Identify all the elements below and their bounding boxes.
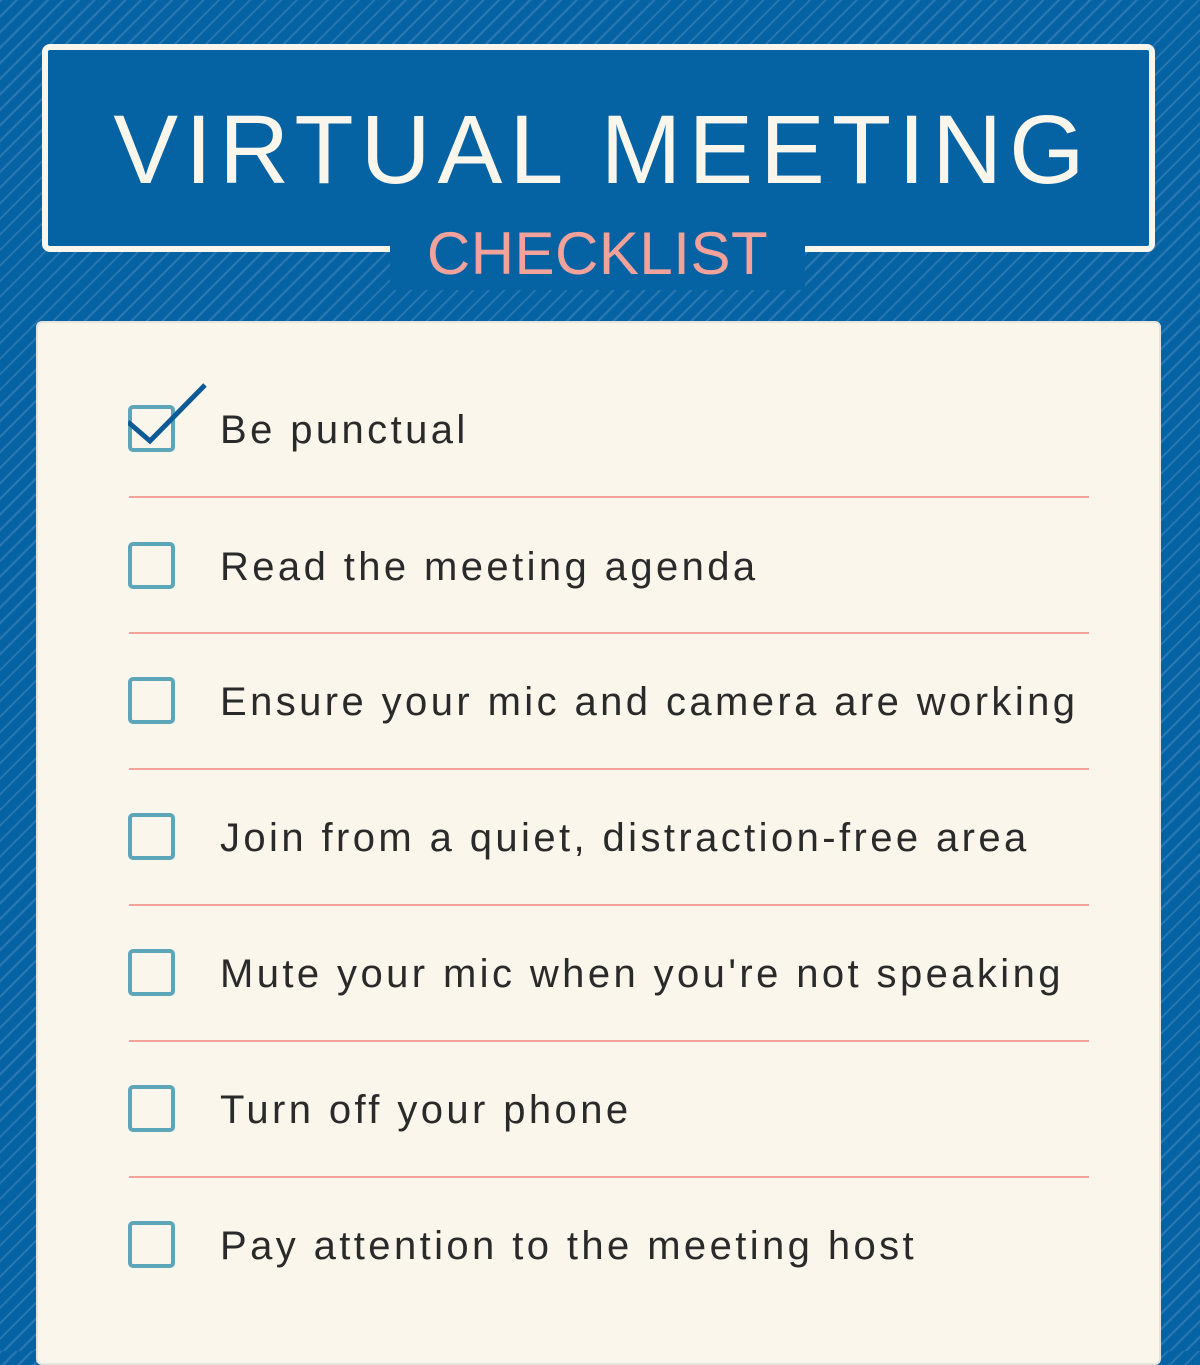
panel: checklist [36, 321, 1161, 1365]
item 1: Be punctual [220, 408, 469, 452]
subtitle [390, 210, 805, 290]
item 3: Ensure your mic and camera are working [220, 680, 1078, 724]
item 2: Read the meeting agenda [220, 545, 759, 589]
title box [42, 44, 1155, 252]
item 6: Turn off your phone [220, 1088, 632, 1132]
item 7: Pay attention to the meeting host [220, 1224, 917, 1268]
item 5: Mute your mic when you're not speaking [220, 952, 1064, 996]
subtitle: CHECKLIST [427, 220, 768, 287]
icon: checked box [128, 405, 175, 452]
title: VIRTUAL MEETING [113, 95, 1092, 204]
item 1 [128, 383, 469, 452]
item 4: Join from a quiet, distraction-free area [220, 816, 1030, 860]
